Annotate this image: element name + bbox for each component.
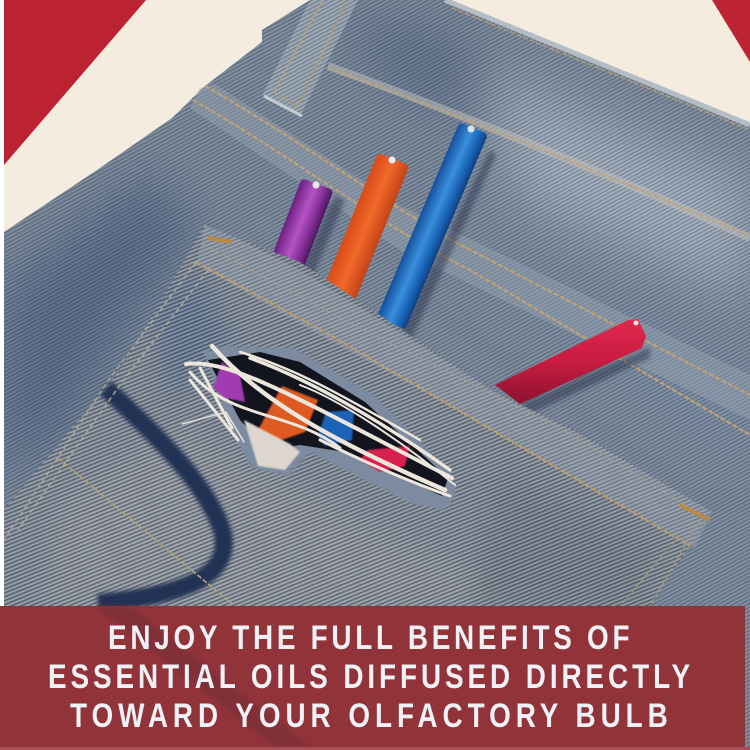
corner bar tacks: [208, 238, 710, 520]
orange pen: [320, 153, 410, 309]
red stripe top left: [4, 0, 146, 165]
line 2: ESSENTIAL OILS DIFFUSED DIRECTLY: [48, 657, 690, 696]
pocket side stitching: [4, 262, 208, 540]
frayed denim edge: [204, 346, 456, 510]
blue pen: [377, 122, 488, 329]
faded ink stripe under banner: [95, 606, 310, 747]
red pen: [495, 319, 646, 404]
pocket light and dark wear: [40, 270, 660, 610]
belt loop: [262, 0, 358, 116]
hem stitching: [196, 262, 690, 546]
back pocket: [4, 225, 712, 606]
background: striped flag fabric: [4, 0, 750, 240]
frayed hole in pocket: [182, 346, 456, 510]
purple pen: [267, 178, 334, 280]
ink curve on pocket: [98, 388, 224, 603]
dark interior: [208, 352, 448, 496]
banner text: [48, 618, 690, 735]
line 3: TOWARD YOUR OLFACTORY BULB: [70, 696, 668, 735]
pen shadows: [296, 150, 650, 414]
pens in the back pocket: [267, 122, 650, 414]
white fray clump: [244, 420, 300, 470]
pocket top hem: [196, 225, 712, 548]
red stripe top right: [712, 0, 750, 62]
pen colours through hole: [213, 362, 410, 472]
loose white threads: [182, 346, 455, 496]
caption banner: [0, 606, 750, 750]
line 1: ENJOY THE FULL BENEFITS OF: [108, 618, 630, 657]
waistband seam: [190, 0, 750, 435]
